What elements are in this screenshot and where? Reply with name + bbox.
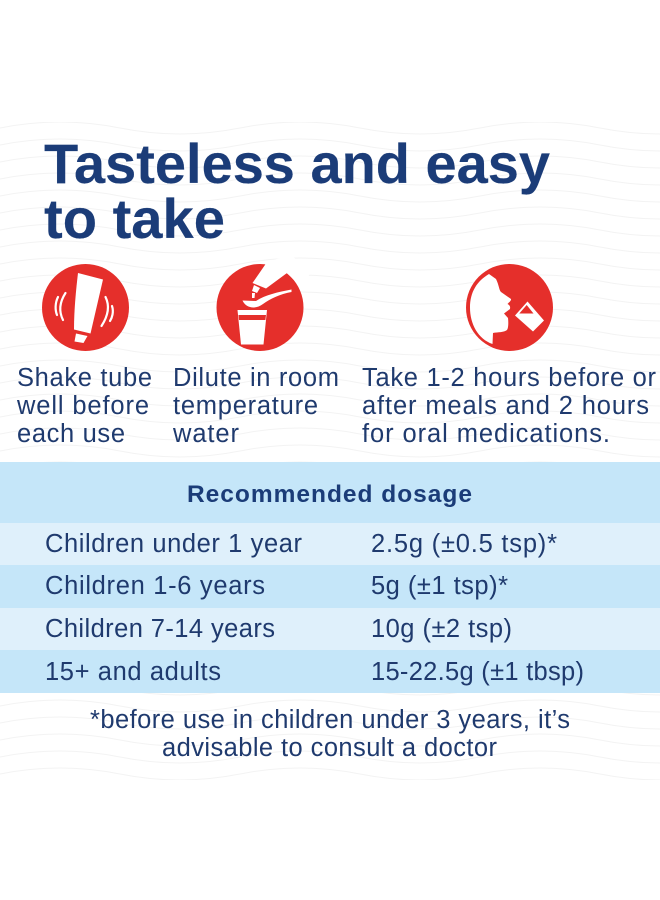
text: dilute	[172, 364, 339, 448]
row: 7-14 years: Children 7-14 years	[45, 615, 275, 643]
row: adults: 15+ and adults	[45, 658, 221, 686]
icon: dilute in water	[216, 255, 312, 351]
icon: shake tube	[42, 264, 129, 351]
title: Tasteless and easy	[44, 132, 550, 195]
row: 1-6 years: Children 1-6 years	[45, 572, 265, 600]
row: under 1 year: 2.5g (±0.5 tsp)*	[371, 530, 557, 558]
text: timing: for oral medications.	[362, 420, 610, 448]
row: 1-6 years: 5g (±1 tsp)*	[371, 572, 508, 600]
text: shake tube: Shake tube	[17, 364, 152, 392]
row: 7-14 years	[45, 615, 512, 643]
text: dilute: Dilute in room	[173, 364, 339, 392]
icon: take before meals	[466, 264, 553, 351]
row: 7-14 years: 10g (±2 tsp)	[371, 615, 512, 643]
row: under 1 year	[45, 530, 557, 558]
footnote: *before use in children under 3 years, it’s	[90, 706, 570, 734]
footnote	[90, 706, 570, 762]
text: timing	[362, 364, 656, 448]
panel: dosage table	[0, 462, 660, 693]
row: adults: 15-22.5g (±1 tbsp)	[371, 658, 584, 686]
text: shake tube	[16, 364, 152, 448]
text: dilute: temperature	[173, 392, 318, 420]
text: shake tube: each use	[17, 420, 125, 448]
row: adults	[45, 658, 584, 686]
title: to take	[44, 187, 225, 250]
row: 1-6 years	[45, 572, 508, 600]
footnote: advisable to consult a doctor	[162, 734, 498, 762]
text: timing: after meals and 2 hours	[362, 392, 649, 420]
text: timing: Take 1-2 hours before or	[362, 364, 656, 392]
row: under 1 year: Children under 1 year	[45, 530, 302, 558]
text: shake tube: well before	[16, 392, 149, 420]
title	[44, 132, 550, 250]
table heading: Recommended dosage	[187, 481, 472, 508]
text: dilute: water	[172, 420, 240, 448]
